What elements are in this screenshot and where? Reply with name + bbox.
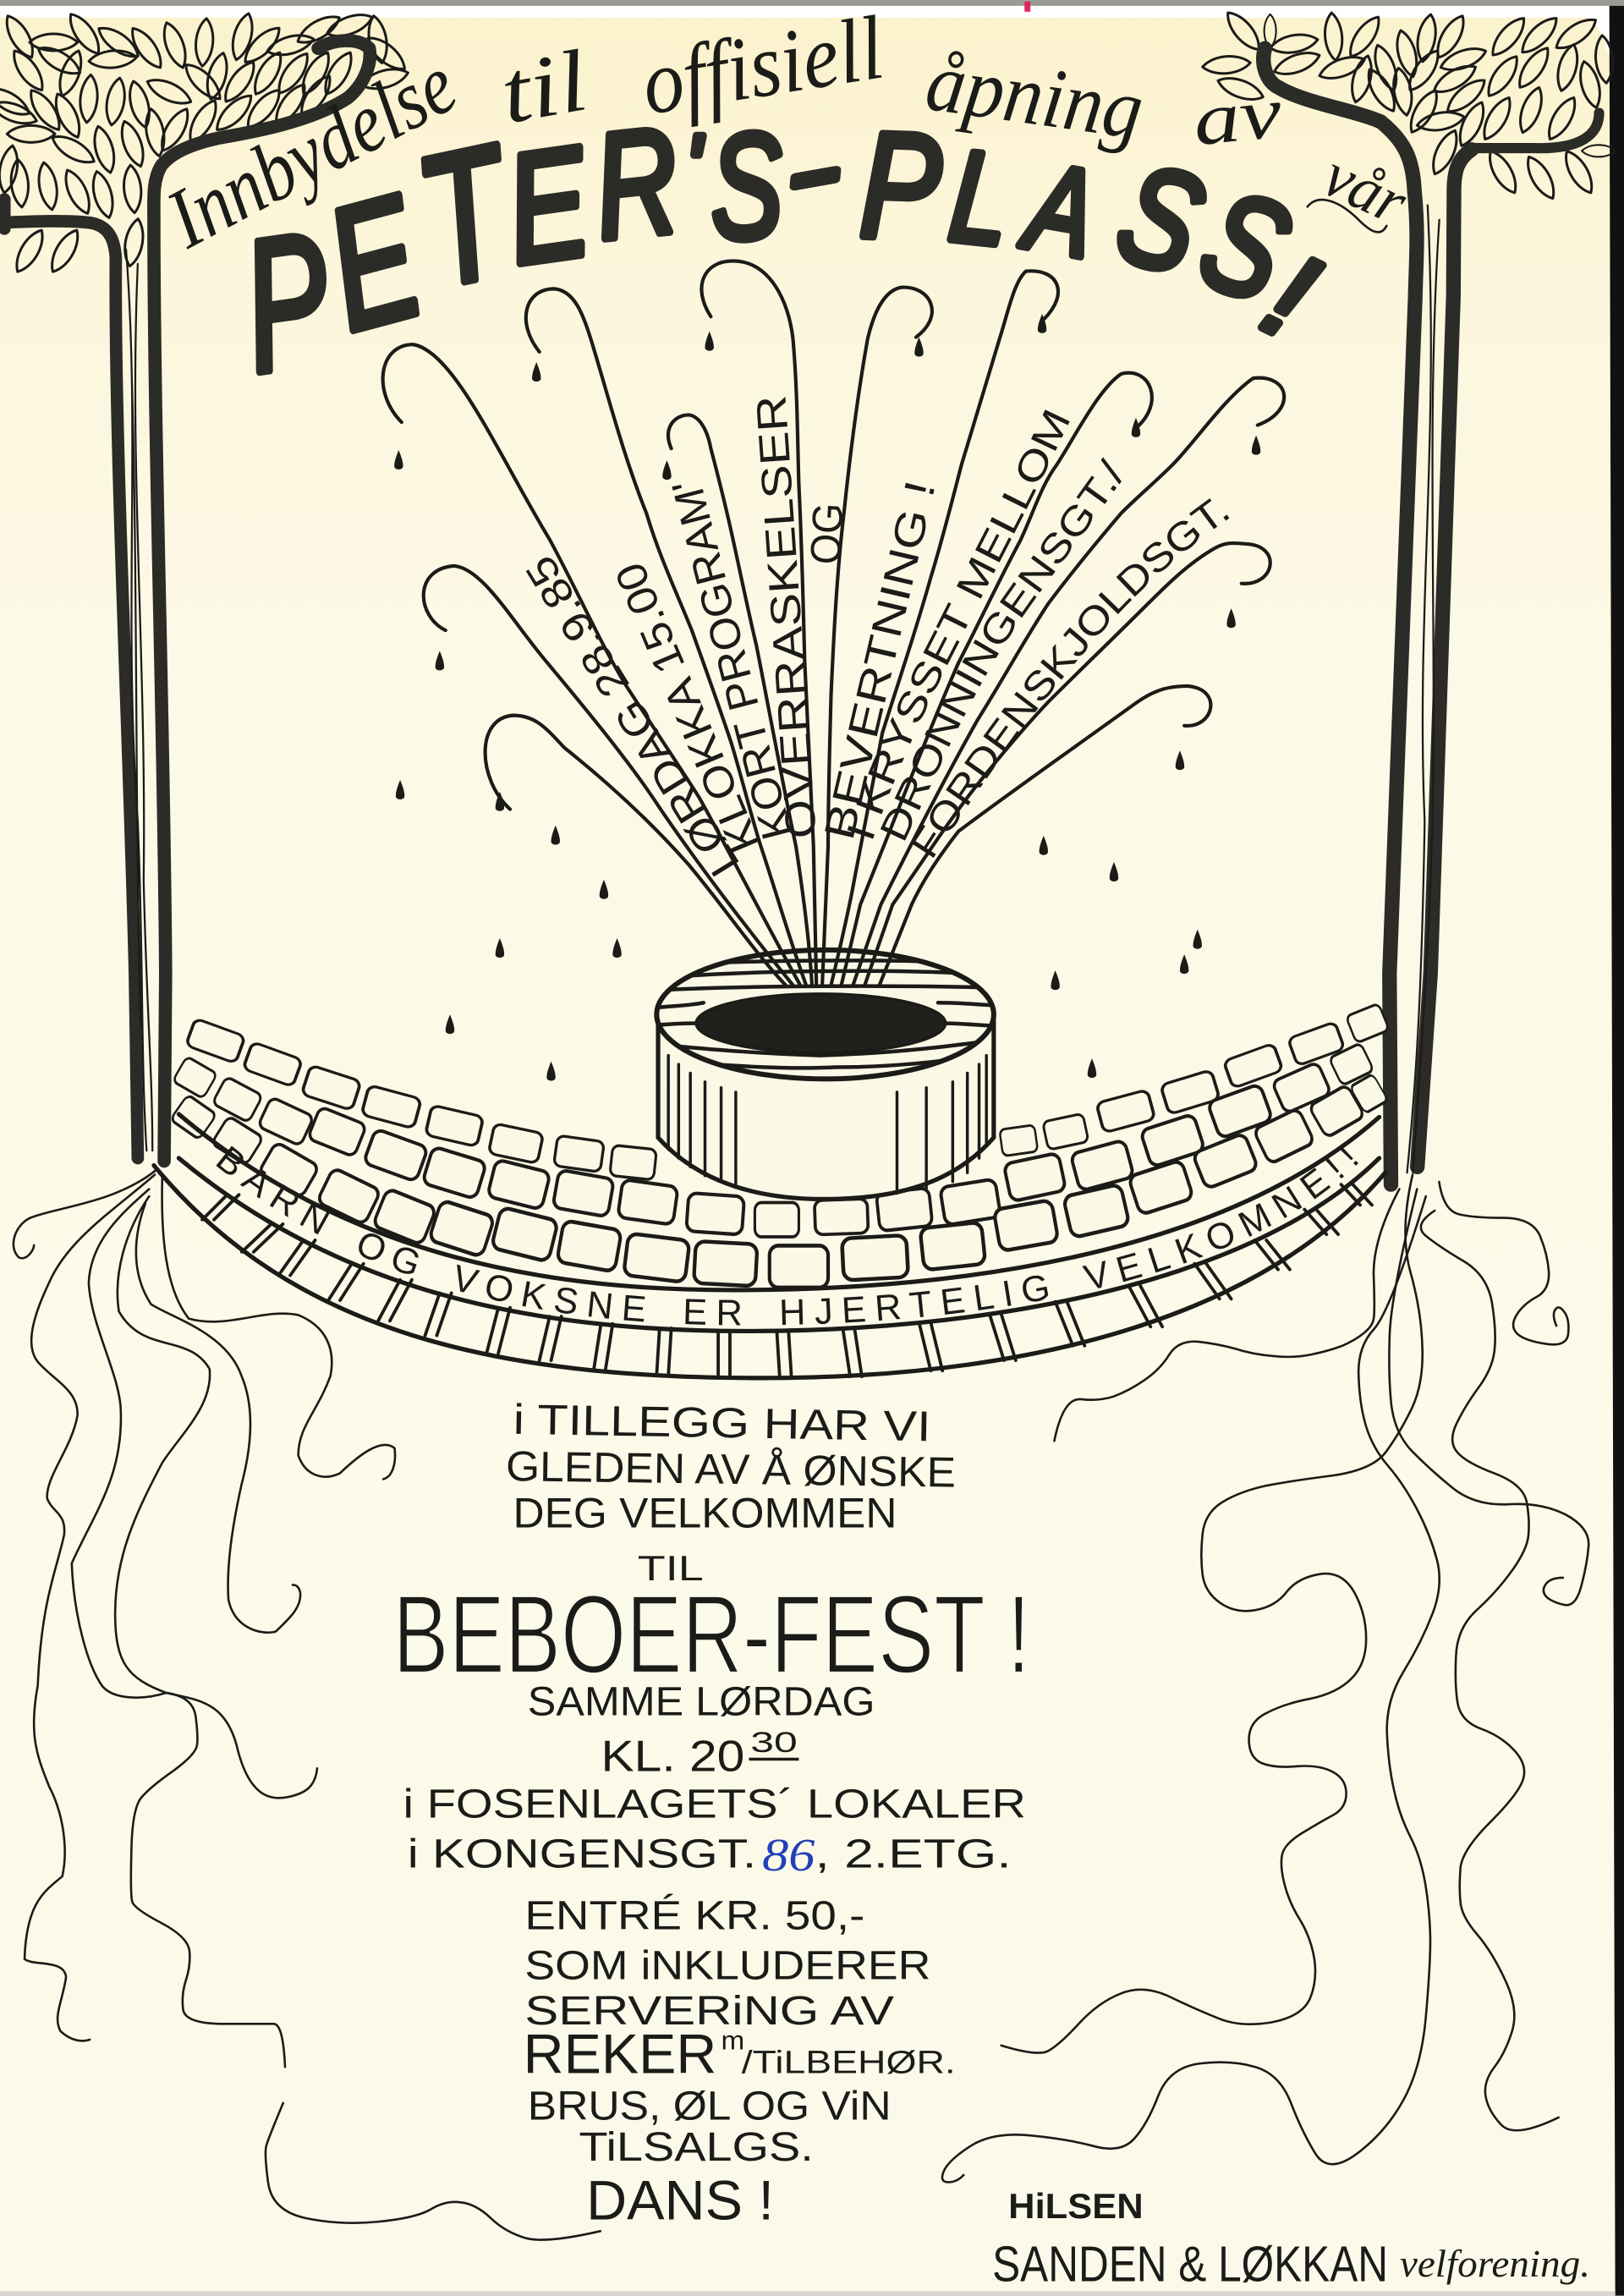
title: PETER'S-PLASS!: P	[232, 193, 343, 412]
venue: i FOSENLAGETS´ LOKALER	[403, 1782, 1026, 1827]
rim planks	[660, 958, 990, 1070]
date: LØRDAG 28.9.85	[516, 547, 749, 885]
shrimp line: m	[721, 2026, 744, 2056]
bottom brick dividers	[202, 1184, 1372, 1378]
shrimp line: REKER	[524, 2022, 716, 2085]
address: 86	[762, 1829, 815, 1881]
title: PETER'S-PLASS!: P	[858, 101, 943, 271]
dancing: DANS !	[586, 2169, 774, 2232]
title: PETER'S-PLASS!: T	[403, 107, 533, 327]
short programme: KORT PROGRAM'	[663, 475, 801, 844]
word: apning: åpning	[921, 33, 1149, 157]
drinks	[528, 2084, 892, 2170]
intro lines	[506, 1396, 956, 1537]
band curves	[154, 1114, 1385, 1378]
title: PETER'S-PLASS!: E	[309, 158, 440, 367]
drinks: TiLSALGS.	[579, 2124, 814, 2170]
time line: 30	[750, 1727, 798, 1759]
fountain spouts	[383, 261, 1284, 985]
entry details	[524, 1892, 930, 2034]
title: PETER'S-PLASS!: S	[708, 102, 785, 271]
shrimp line	[524, 2022, 956, 2085]
time line	[601, 1727, 798, 1781]
title: PETER'S-PLASS!: S	[1103, 133, 1218, 305]
paving stones, upper rows	[170, 1003, 1389, 1288]
title: PETER'S-PLASS!: !	[1246, 228, 1335, 364]
beboer-fest invitation text	[392, 1396, 1590, 2292]
shrimp line: /TiLBEHØR.	[742, 2044, 956, 2080]
invitation script heading	[151, 0, 1418, 266]
and: OG	[802, 502, 852, 566]
left tree	[0, 9, 410, 1161]
welcome band	[151, 1112, 1387, 1381]
event name: BEBOER-FEST !	[392, 1572, 1030, 1696]
left trunk and branches	[0, 200, 138, 1158]
title: PETER'S-PLASS!: S	[1182, 159, 1307, 332]
title: PETER'S-PLASS!: '	[686, 117, 704, 215]
entry details: SERVERiNG AV	[524, 1988, 895, 2034]
til: TIL	[638, 1548, 704, 1588]
word: til: til	[494, 32, 595, 142]
entry details: SOM iNKLUDERER	[524, 1942, 930, 1988]
title: PETER'S-PLASS!: A	[1013, 135, 1106, 283]
water drops	[394, 314, 1260, 1081]
right roots	[942, 1175, 1588, 2182]
fountain well	[645, 950, 1012, 1199]
refreshments: BEVERTNING !	[815, 476, 945, 844]
title: PETER'S-PLASS!: L	[944, 124, 1016, 272]
well body	[658, 1019, 994, 1199]
band lettering: BARN OG VOKSNE ER HJERTELIG VELKOMNE!!	[217, 1145, 1358, 1325]
right trunk and branches	[1264, 48, 1417, 1184]
spout lettering	[495, 362, 1260, 899]
signature: SANDEN & LØKKAN	[992, 2237, 1388, 2292]
time line: KL. 20	[601, 1732, 744, 1781]
well staves	[668, 1056, 986, 1194]
address	[408, 1829, 1012, 1881]
word: Innbydelse: Innbydelse	[151, 36, 470, 266]
right tree	[1202, 8, 1616, 1184]
title: PETER'S-PLASS!	[232, 96, 1335, 412]
title: PETER'S-PLASS!: -	[773, 100, 850, 239]
title: PETER'S-PLASS!: E	[497, 113, 601, 297]
right canopy leaves	[1202, 8, 1616, 203]
well opening	[696, 994, 946, 1052]
brick row 1	[186, 1003, 1389, 1180]
intro lines: GLEDEN AV Å ØNSKE	[506, 1442, 956, 1497]
crossing between: I KRYSSET MELLOM	[848, 409, 1070, 839]
intro lines: DEG VELKOMMEN	[513, 1490, 897, 1537]
signature: velforening.	[1400, 2243, 1590, 2285]
surprises: OVERRASKELSER	[747, 393, 826, 840]
drinks: BRUS, ØL OG ViN	[528, 2084, 892, 2129]
brick row 3	[170, 1074, 1388, 1288]
brick row 2	[173, 1043, 1374, 1237]
left roots	[14, 1171, 601, 2240]
time: KLOKKA 15.00	[606, 556, 770, 860]
well rim	[656, 950, 994, 1079]
date line: SAMME LØRDAG	[528, 1678, 875, 1724]
intro lines: i TILLEGG HAR VI	[513, 1396, 931, 1450]
address: , 2.ETG.	[815, 1832, 1012, 1877]
word: av: av	[1189, 71, 1286, 161]
entry details: ENTRÉ KR. 50,-	[524, 1892, 864, 1938]
street two: FORDENSKJOLDSGT.	[914, 498, 1230, 858]
street one: DRONNINGENSGT./	[880, 457, 1122, 841]
address: i KONGENSGT.	[408, 1832, 756, 1877]
greeting: HiLSEN	[1008, 2186, 1144, 2226]
left canopy leaves	[0, 9, 410, 276]
word: var: vår	[1313, 140, 1418, 239]
title: PETER'S-PLASS!: R	[587, 96, 686, 272]
